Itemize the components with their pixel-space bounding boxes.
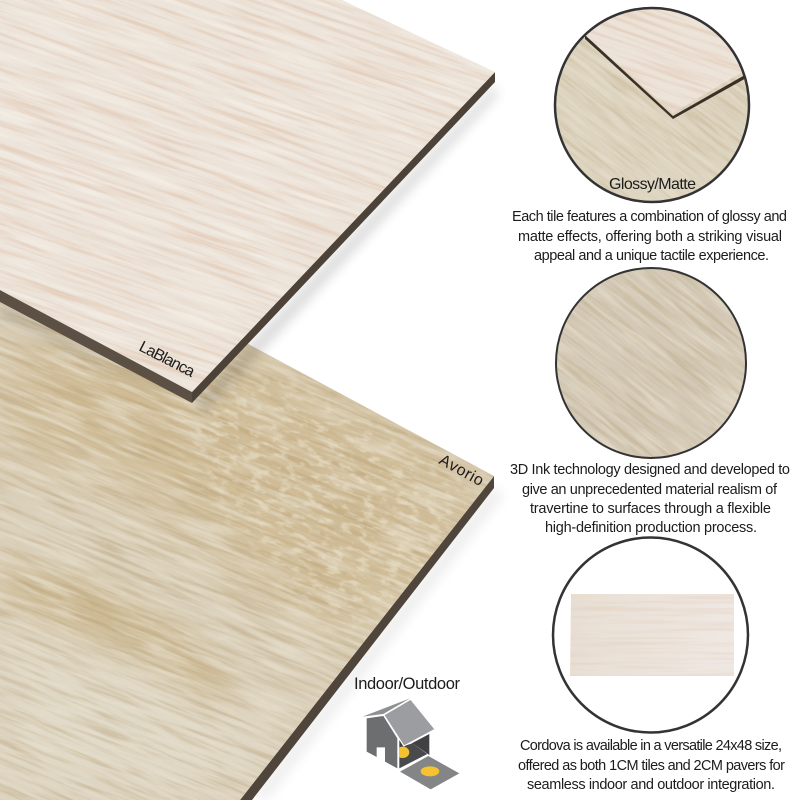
circle: Glossy/Matte	[550, 5, 755, 205]
text: 3D Ink description	[510, 462, 790, 536]
Avorio shadow on background	[252, 486, 504, 798]
circle: travertine close-up	[555, 267, 747, 459]
tile swatch	[570, 594, 734, 676]
text: 3D Ink description: give an unprecedented material realism of	[522, 482, 778, 498]
text: Cordova description: Cordova is available in a versatile 24x48 size,	[520, 738, 782, 754]
text: glossy and matte description: appeal and a unique tactile experience.	[534, 248, 769, 264]
label: Glossy/Matte: Glossy/Matte	[609, 176, 696, 193]
text: 3D Ink description: high-definition production process.	[545, 520, 757, 536]
LaBlanca edge	[0, 290, 192, 403]
Avorio edge	[240, 476, 494, 800]
icon: house with indoor and outdoor floor	[363, 698, 459, 789]
text: glossy and matte description: matte effects, offering both a striking visual	[518, 229, 782, 245]
tile: Avorio	[0, 290, 500, 800]
text: 3D Ink description: travertine to surfaces through a flexible	[530, 501, 771, 517]
heading: Indoor/Outdoor: Indoor/Outdoor	[354, 675, 460, 693]
text: Cordova description: seamless indoor and outdoor integration.	[527, 777, 775, 793]
inset tiles	[556, 9, 748, 201]
text: glossy and matte description	[512, 209, 787, 264]
label: LaBlanca: LaBlanca	[136, 338, 197, 381]
label: Avorio: Avorio	[436, 452, 486, 490]
tile: LaBlanca	[0, 0, 500, 412]
Avorio surface	[0, 290, 494, 800]
text: 3D Ink description: 3D Ink technology designed and developed to	[510, 462, 790, 478]
circle: 24x48 tile size	[553, 538, 748, 732]
text: glossy and matte description: Each tile features a combination of glossy and	[512, 209, 787, 225]
text: Cordova description	[518, 738, 785, 793]
text: Cordova description: offered as both 1CM tiles and 2CM pavers for	[518, 758, 785, 774]
LaBlanca surface	[0, 0, 500, 400]
LaBlanca shadow	[0, 86, 498, 412]
